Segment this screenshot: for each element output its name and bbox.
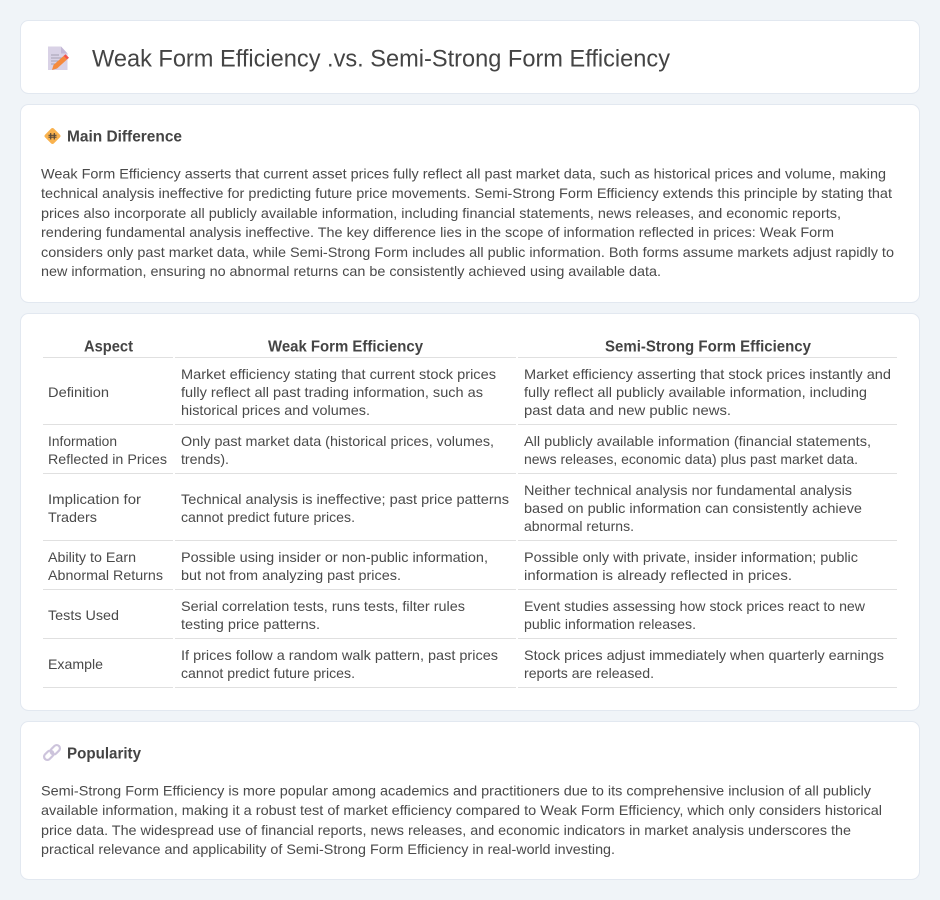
row: information reflected: Only past market data (historical prices, volumes, — [181, 433, 494, 449]
row: implication for traders: Traders — [48, 509, 97, 525]
row: information reflected: news releases, economic data) plus past market data. — [524, 451, 858, 467]
row: ability to earn abnormal returns: Possible using insider or non-public information, — [181, 549, 488, 565]
row: implication for traders: Implication for — [48, 491, 141, 507]
text block: popularity paragraph — [41, 782, 882, 857]
text block: main difference paragraph: technical analysis ineffective for predicting future price movements. Semi-Strong Form Efficiency extends this principle by stating that — [41, 185, 892, 201]
row: definition: fully reflect all past trading information, such as — [181, 384, 483, 400]
table row lines — [43, 357, 897, 688]
row: information reflected: trends). — [181, 451, 229, 467]
row: information reflected: All publicly available information (financial statements, — [524, 433, 871, 449]
table header: Weak Form Efficiency — [268, 338, 423, 356]
text block: main difference paragraph: rendering fundamental analysis ineffective. The key difference lies in the scope of information reflected in prices: Weak Form — [41, 224, 834, 240]
text block: popularity paragraph: Semi-Strong Form Efficiency is more popular among academics and practitioners due to its comprehensive inclusion of all publicly — [41, 782, 871, 798]
row: ability to earn abnormal returns: Possible only with private, insider information; public — [524, 549, 858, 565]
row: ability to earn abnormal returns — [48, 549, 858, 583]
row: implication for traders — [48, 482, 862, 534]
row: definition: historical prices and volumes. — [181, 402, 370, 418]
icon: orange diamond — [44, 127, 61, 145]
text block: main difference paragraph: Weak Form Efficiency asserts that current asset prices fully reflect all past market data, such as historical prices and volume, making — [41, 166, 886, 182]
text block: popularity paragraph: price data. The widespread use of financial reports, news releases, and economic indicators in market analysis underscores the — [41, 822, 851, 838]
panel: popularity — [20, 722, 920, 880]
text block: popularity paragraph: available information, making it a robust test of market efficiency compared to Weak Form Efficiency, which only considers historical — [41, 802, 882, 818]
row: tests used: testing price patterns. — [181, 616, 320, 632]
row: ability to earn abnormal returns: Abnormal Returns — [48, 567, 163, 583]
table header: Aspect — [84, 338, 134, 356]
row: definition: Market efficiency stating that current stock prices — [181, 366, 496, 382]
row: implication for traders: based on public information can consistently achieve — [524, 500, 862, 516]
row: definition: Definition — [48, 384, 109, 400]
panel: comparison table — [20, 314, 920, 710]
table header: Semi-Strong Form Efficiency — [605, 338, 811, 356]
text block: main difference paragraph: considers only past market data, while Semi-Strong Form includes all public information. Both forms assume markets adjust rapidly to — [41, 244, 894, 260]
row: example: Example — [48, 656, 103, 672]
row: ability to earn abnormal returns: information is already reflected in prices. — [524, 567, 792, 583]
heading: popularity: Popularity — [67, 746, 141, 762]
row: information reflected: Reflected in Prices — [48, 451, 167, 467]
text block: main difference paragraph: prices also incorporate all publicly available information, including financial statements, news releases, and economic reports, — [41, 205, 841, 221]
panel: main difference — [20, 104, 920, 302]
row: tests used — [48, 598, 866, 632]
row: implication for traders: abnormal returns. — [524, 518, 634, 534]
panel: title header — [20, 20, 920, 94]
row: example: Stock prices adjust immediately when quarterly earnings — [524, 647, 884, 663]
row: example: reports are released. — [524, 665, 654, 681]
row: implication for traders: Neither technical analysis nor fundamental analysis — [524, 482, 852, 498]
row: ability to earn abnormal returns: but not from analyzing past prices. — [181, 567, 401, 583]
row: tests used: Event studies assessing how stock prices react to new — [524, 598, 866, 614]
row: tests used: Tests Used — [48, 607, 119, 623]
row: information reflected — [48, 433, 871, 467]
icon: document with pencil — [48, 46, 69, 70]
row: definition: past data and new public news. — [524, 402, 731, 418]
text block: popularity paragraph: practical relevance and applicability of Semi-Strong Form Efficiency in real-world investing. — [41, 841, 615, 857]
text block: main difference paragraph: new information, ensuring no abnormal returns can be consistently achieved using available data. — [41, 263, 661, 279]
icon: link chain — [43, 744, 61, 761]
row: example: If prices follow a random walk pattern, past prices — [181, 647, 498, 663]
row: information reflected: Information — [48, 433, 117, 449]
row: implication for traders: cannot predict future prices. — [181, 509, 355, 525]
row: definition: fully reflect all publicly available information, including — [524, 384, 867, 400]
text block: main difference paragraph — [41, 166, 894, 279]
heading: main difference: Main Difference — [67, 128, 182, 146]
row: implication for traders: Technical analysis is ineffective; past price patterns — [181, 491, 509, 507]
row: example: cannot predict future prices. — [181, 665, 355, 681]
row: tests used: public information releases. — [524, 616, 696, 632]
table header — [84, 338, 811, 356]
row: definition: Market efficiency asserting that stock prices instantly and — [524, 366, 891, 382]
row: tests used: Serial correlation tests, runs tests, filter rules — [181, 598, 465, 614]
row: definition — [48, 366, 891, 418]
row: ability to earn abnormal returns: Ability to Earn — [48, 549, 136, 565]
row: example — [48, 647, 884, 681]
title: Weak Form Efficiency .vs. Semi-Strong Form Efficiency — [92, 46, 670, 72]
